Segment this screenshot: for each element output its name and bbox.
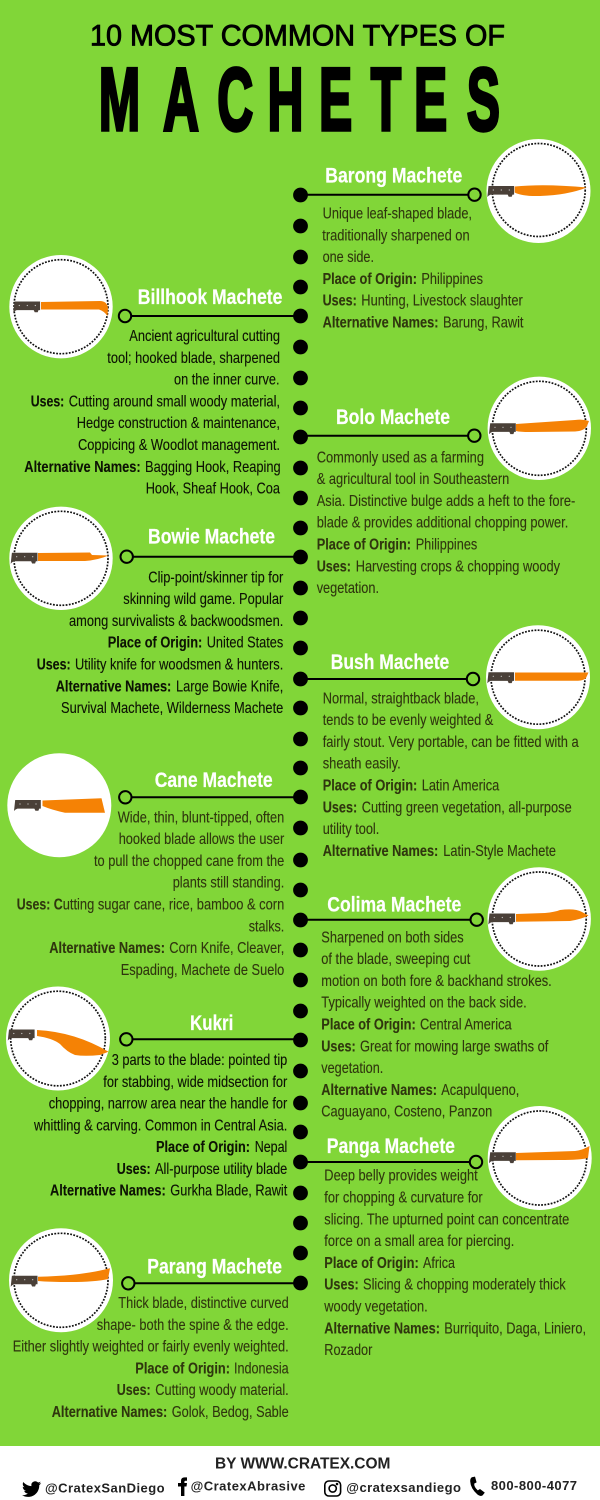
description: utility tool. [323, 821, 379, 838]
icon: twitter [22, 1481, 41, 1497]
heading: Colima Machete [327, 894, 461, 917]
description: Utility knife for woodsmen & hunters. [75, 656, 283, 674]
description: to pull the chopped cane from the [94, 853, 284, 870]
panel: barong machete [300, 139, 590, 332]
description: of the blade, sweeping cut [321, 951, 471, 968]
description: Caguayano, Costeno, Panzon [321, 1104, 492, 1121]
description: Alternative Names: [50, 1183, 166, 1200]
description: Ancient agricultural cutting [129, 328, 280, 345]
description: Hunting, Livestock slaughter [361, 293, 523, 310]
description [13, 1295, 289, 1421]
icon: phone [470, 1477, 485, 1496]
description: Unique leaf-shaped blade, [323, 206, 472, 222]
description: Uses: [31, 393, 64, 410]
description: woody vegetation. [323, 1298, 428, 1316]
description: Alternative Names: [324, 1320, 440, 1337]
description: stalks. [249, 918, 284, 935]
panel: billhook machete [9, 255, 300, 498]
description: Latin America [422, 778, 499, 794]
description: chopping, narrow area near the handle for [49, 1096, 288, 1113]
panel: kukri [6, 986, 300, 1200]
description: Cutting around small woody material, [69, 393, 280, 410]
connector [119, 791, 300, 804]
footer [0, 1446, 600, 1500]
description [321, 929, 552, 1121]
description [322, 206, 524, 332]
description: force on a small area for piercing. [324, 1233, 514, 1250]
description: Clip-point/skinner tip for [148, 569, 284, 586]
panel: bolo machete [300, 377, 591, 597]
description: United States [207, 635, 283, 652]
description: Alternative Names: [323, 314, 438, 332]
heading: Bolo Machete [336, 406, 450, 429]
description: 3 parts to the blade: pointed tip [112, 1052, 287, 1069]
description: Place of Origin: [108, 635, 202, 652]
icon: cane machete [7, 753, 111, 857]
connector [120, 550, 300, 563]
description: plants still standing. [173, 875, 284, 892]
description: Nepal [255, 1139, 287, 1156]
connector [119, 310, 300, 322]
description: Place of Origin: [156, 1139, 250, 1156]
description: Alternative Names: [49, 940, 165, 957]
description: Bagging Hook, Reaping [145, 459, 281, 476]
description: Place of Origin: [324, 1255, 419, 1272]
description: Africa [423, 1255, 455, 1272]
description: Uses: [323, 799, 357, 816]
connector [300, 188, 481, 201]
title line: 10 most common types of: 10 MOST COMMON TYPES OF [90, 20, 505, 53]
description: Either slightly weighted or fairly evenly weighted. [13, 1339, 289, 1356]
description: Uses: [317, 558, 351, 575]
connector [120, 1033, 300, 1046]
panel: colima machete [300, 867, 591, 1121]
icon: colima machete [488, 867, 591, 971]
description: Normal, straightback blade, [323, 690, 479, 707]
description: Cutting woody material. [155, 1382, 289, 1399]
description: Alternative Names: [321, 1082, 437, 1099]
description: on the inner curve. [174, 372, 280, 389]
icon: kukri [6, 986, 110, 1090]
panel: bowie machete [9, 507, 300, 717]
description: tool; hooked blade, sharpened [107, 350, 280, 367]
description [317, 449, 575, 597]
twitter handle: @CratexSanDiego [45, 1480, 165, 1496]
facebook handle: @CratexAbrasive [191, 1479, 305, 1494]
connector [300, 914, 483, 926]
description: Uses: [37, 656, 71, 674]
description: Golok, Bedog, Sable [172, 1404, 289, 1421]
connector [300, 430, 480, 442]
description: Coppicing & Woodlot management. [78, 437, 280, 454]
description: skinning wild game. Popular [123, 591, 284, 608]
description [24, 328, 281, 498]
description: Acapulqueno, [441, 1082, 519, 1099]
icon: barong machete [486, 139, 590, 243]
description [323, 1168, 586, 1359]
heading: Billhook Machete [138, 286, 282, 309]
description: traditionally sharpened on [322, 227, 470, 244]
description: Gurkha Blade, Rawit [170, 1183, 288, 1200]
description: Place of Origin: [323, 271, 417, 288]
panel: cane machete [7, 753, 300, 979]
description: Barung, Rawit [443, 314, 524, 332]
description: sheath easily. [323, 756, 401, 773]
icon: bowie machete [9, 507, 113, 610]
description: Philippines [416, 536, 477, 554]
description: Latin-Style Machete [443, 843, 556, 860]
description: Uses: C [17, 896, 63, 914]
description: Uses: [324, 1277, 359, 1294]
description [323, 690, 579, 860]
description: Alternative Names: [56, 678, 171, 695]
description: Place of Origin: [321, 1016, 416, 1034]
connector [122, 1277, 300, 1290]
description: Typically weighted on the back side. [321, 995, 527, 1012]
description: & agricultural tool in Southeastern [317, 471, 509, 488]
panel: bush machete [300, 625, 590, 860]
description: Commonly used as a farming [317, 449, 484, 466]
description: Uses: [321, 1038, 356, 1055]
icon: panga machete [488, 1106, 592, 1210]
description: Place of Origin: [323, 778, 417, 794]
heading: Cane Machete [155, 769, 273, 792]
description: Sharpened on both sides [321, 929, 464, 946]
title word: machetes: MACHETES [99, 51, 500, 150]
icon: bolo machete [488, 377, 591, 480]
heading: Barong Machete [325, 165, 462, 188]
icon: facebook [178, 1477, 187, 1496]
description: Hook, Sheaf Hook, Coa [146, 481, 280, 498]
description: Deep belly provides weight [324, 1168, 478, 1185]
description: Great for mowing large swaths of [360, 1038, 549, 1055]
description: Large Bowie Knife, [176, 678, 283, 695]
panel: parang machete [9, 1228, 300, 1421]
description: tends to be evenly weighted & [323, 712, 494, 729]
heading: Panga Machete [327, 1135, 455, 1158]
description: among survivalists & backwoodsmen. [69, 613, 283, 630]
title [90, 20, 505, 150]
description: Wide, thin, blunt-tipped, often [118, 809, 284, 826]
description: for stabbing, wide midsection for [103, 1074, 288, 1091]
connector [300, 1156, 482, 1168]
description: vegetation. [317, 580, 379, 597]
description: whittling & carving. Common in Central Asia. [33, 1117, 287, 1134]
description [33, 1052, 288, 1200]
icon: bush machete [486, 625, 590, 729]
description: Indonesia [234, 1360, 289, 1377]
heading: Parang Machete [147, 1255, 282, 1278]
footer credit: BY WWW.CRATEX.COM [215, 1455, 390, 1472]
description: Alternative Names: [52, 1404, 167, 1421]
description: Corn Knife, Cleaver, [169, 940, 284, 957]
description: Espading, Machete de Suelo [121, 962, 284, 979]
connector [300, 673, 479, 685]
description: Hedge construction & maintenance, [77, 415, 280, 432]
description: Place of Origin: [317, 536, 411, 554]
description [37, 569, 284, 717]
description: Alternative Names: [24, 459, 141, 476]
description: All-purpose utility blade [155, 1161, 287, 1178]
description: Alternative Names: [323, 843, 438, 860]
description: Philippines [421, 271, 483, 288]
description: Uses: [323, 293, 357, 310]
description: Uses: [117, 1161, 151, 1178]
heading: Bowie Machete [148, 526, 275, 548]
description: Thick blade, distinctive curved [118, 1295, 289, 1312]
description: Place of Origin: [135, 1360, 230, 1377]
heading: Bush Machete [331, 651, 449, 674]
heading: Kukri [190, 1012, 233, 1035]
phone number: 800-800-4077 [491, 1478, 577, 1493]
icon: billhook machete [9, 255, 113, 358]
description: vegetation. [321, 1060, 383, 1077]
description: utting sugar cane, rice, bamboo & corn [63, 896, 284, 914]
description: Central America [420, 1016, 512, 1034]
panel: panga machete [300, 1106, 592, 1359]
description: Survival Machete, Wilderness Machete [61, 700, 283, 717]
description [17, 809, 285, 979]
description: one side. [323, 249, 374, 266]
icon: parang machete [9, 1228, 113, 1332]
description: motion on both fore & backhand strokes. [321, 973, 552, 990]
description: Uses: [117, 1382, 151, 1399]
description: Rozador [324, 1342, 373, 1359]
central timeline dots [293, 188, 308, 1290]
icon: instagram [325, 1481, 341, 1496]
description: hooked blade allows the user [119, 831, 285, 848]
instagram handle: @cratexsandiego [346, 1480, 461, 1495]
description: shape- both the spine & the edge. [97, 1317, 289, 1334]
description: for chopping & curvature for [324, 1190, 483, 1206]
